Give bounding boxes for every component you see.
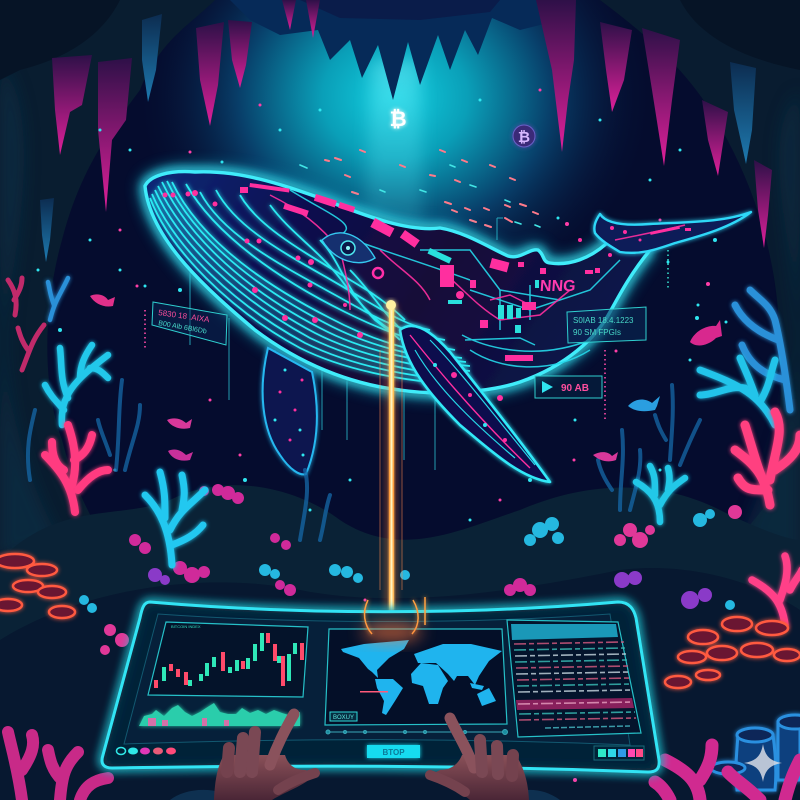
- coral: magenta bottom right: [655, 745, 800, 800]
- trading console: [102, 602, 659, 772]
- whale throat grooves: [150, 181, 470, 384]
- pectoral fin: [400, 326, 550, 482]
- icon: bitcoin coin bright: ₿: [389, 107, 407, 131]
- cave wall shading: [0, 0, 800, 560]
- fish: pink left lowest: [168, 450, 193, 461]
- right palm: [430, 755, 529, 800]
- coral: pink lower right: [752, 556, 800, 625]
- highlighted row: [516, 698, 634, 710]
- cave ceiling with central stalactites: [230, 0, 570, 100]
- coral: pink left: [45, 425, 108, 512]
- reef floor: [0, 485, 800, 800]
- whale back circuit lines: [290, 190, 620, 367]
- table header: [511, 624, 618, 640]
- whale eye: [322, 233, 383, 278]
- timeline axis: [326, 730, 508, 734]
- world map: [341, 640, 502, 715]
- start button: [367, 745, 420, 758]
- icon: sparkle watermark: [744, 744, 782, 782]
- whale halo: [145, 172, 650, 393]
- fish: pink upper left: [90, 294, 115, 307]
- reef floor front: [0, 568, 800, 800]
- candles green: [162, 633, 297, 686]
- console glass: [102, 602, 659, 772]
- left hand: [170, 714, 316, 800]
- right fingers: [430, 718, 513, 792]
- colour squares right: [594, 746, 644, 760]
- candles red: [154, 633, 304, 688]
- fish: pink right lower: [593, 452, 618, 461]
- chart title: BITCOIN INDEX: [171, 624, 201, 629]
- map panel: [325, 629, 507, 725]
- volume chart: [139, 703, 300, 726]
- table footer: [545, 726, 630, 728]
- whale cyan data blocks: [427, 248, 539, 333]
- coral: magenta bottom left: [8, 732, 108, 800]
- data callout: play: 90 AB: [561, 383, 589, 394]
- data callout: right: S0IAB 18.4.1223: [573, 316, 634, 325]
- start button: BTOP: [382, 748, 405, 757]
- coral: cyan right: [700, 358, 775, 425]
- fish: pink right: [690, 320, 722, 345]
- light beam: [360, 60, 425, 330]
- fish: pink left lower: [167, 418, 192, 429]
- map badge: [330, 712, 357, 721]
- chart panel: [148, 622, 308, 697]
- icon: bitcoin coin dim: ₿: [518, 128, 530, 146]
- whale tail fluke: [594, 212, 751, 253]
- map badge: BOXUY: [333, 715, 354, 721]
- coral: small blue upper left: [48, 278, 68, 320]
- right hand: [430, 718, 560, 800]
- table rows: [514, 642, 636, 720]
- whale: [145, 172, 751, 482]
- background: cavern light from above: [0, 0, 800, 480]
- left fingers: [227, 714, 315, 790]
- coral: blue upper right: [735, 290, 790, 410]
- colour dots left: [116, 748, 176, 754]
- coral: cyan left: [45, 345, 108, 425]
- data callout: left: [152, 302, 227, 345]
- barrel sponges: bottom right: [711, 715, 800, 790]
- data callout: right: 90 SM FPGIs: [573, 328, 621, 337]
- particles: [36, 88, 728, 782]
- coral: cyan mid right: [636, 466, 685, 522]
- left flipper: [263, 348, 317, 474]
- data callout: right: [567, 307, 646, 343]
- coral: reef clusters: [79, 484, 742, 655]
- mushroom coral: right: [665, 617, 800, 688]
- pink and blue stalactites: [40, 0, 772, 262]
- thin data lines below whale: [190, 218, 503, 470]
- whale body: [145, 172, 650, 393]
- laser impact glow: [362, 622, 422, 642]
- whale body label: NNG: [539, 278, 576, 295]
- whale tail marks: [585, 226, 691, 274]
- whale pink data blocks: [162, 183, 612, 361]
- right sleeve: [500, 790, 560, 800]
- whale circuit lines pink: [270, 195, 685, 320]
- console inner bezel: [124, 614, 630, 745]
- coral: cyan centre left: [145, 472, 205, 565]
- laser beam: [380, 300, 402, 615]
- order table panel: [507, 620, 641, 737]
- data callout: left: 5830 18 .AIXA: [158, 308, 211, 324]
- cave wall: left: [0, 0, 215, 800]
- left palm: [214, 755, 316, 800]
- map marker line: [360, 691, 388, 692]
- data callout: left: B00 Alb 6Bl6Db: [158, 320, 207, 336]
- coral: pink right: [735, 412, 800, 505]
- left sleeve: [170, 790, 240, 800]
- coral: pink upper left: [8, 278, 44, 370]
- bracket glow where laser meets console: [365, 597, 425, 634]
- fish: blue right: [628, 396, 660, 411]
- icon: bitcoin coin dim: [513, 125, 535, 147]
- cave wall: right: [600, 0, 800, 800]
- mushroom coral: left: [0, 554, 75, 618]
- data callout: play: [535, 376, 602, 398]
- dotted pink data columns: [145, 250, 668, 420]
- coral: dim seaweed back: [28, 380, 700, 540]
